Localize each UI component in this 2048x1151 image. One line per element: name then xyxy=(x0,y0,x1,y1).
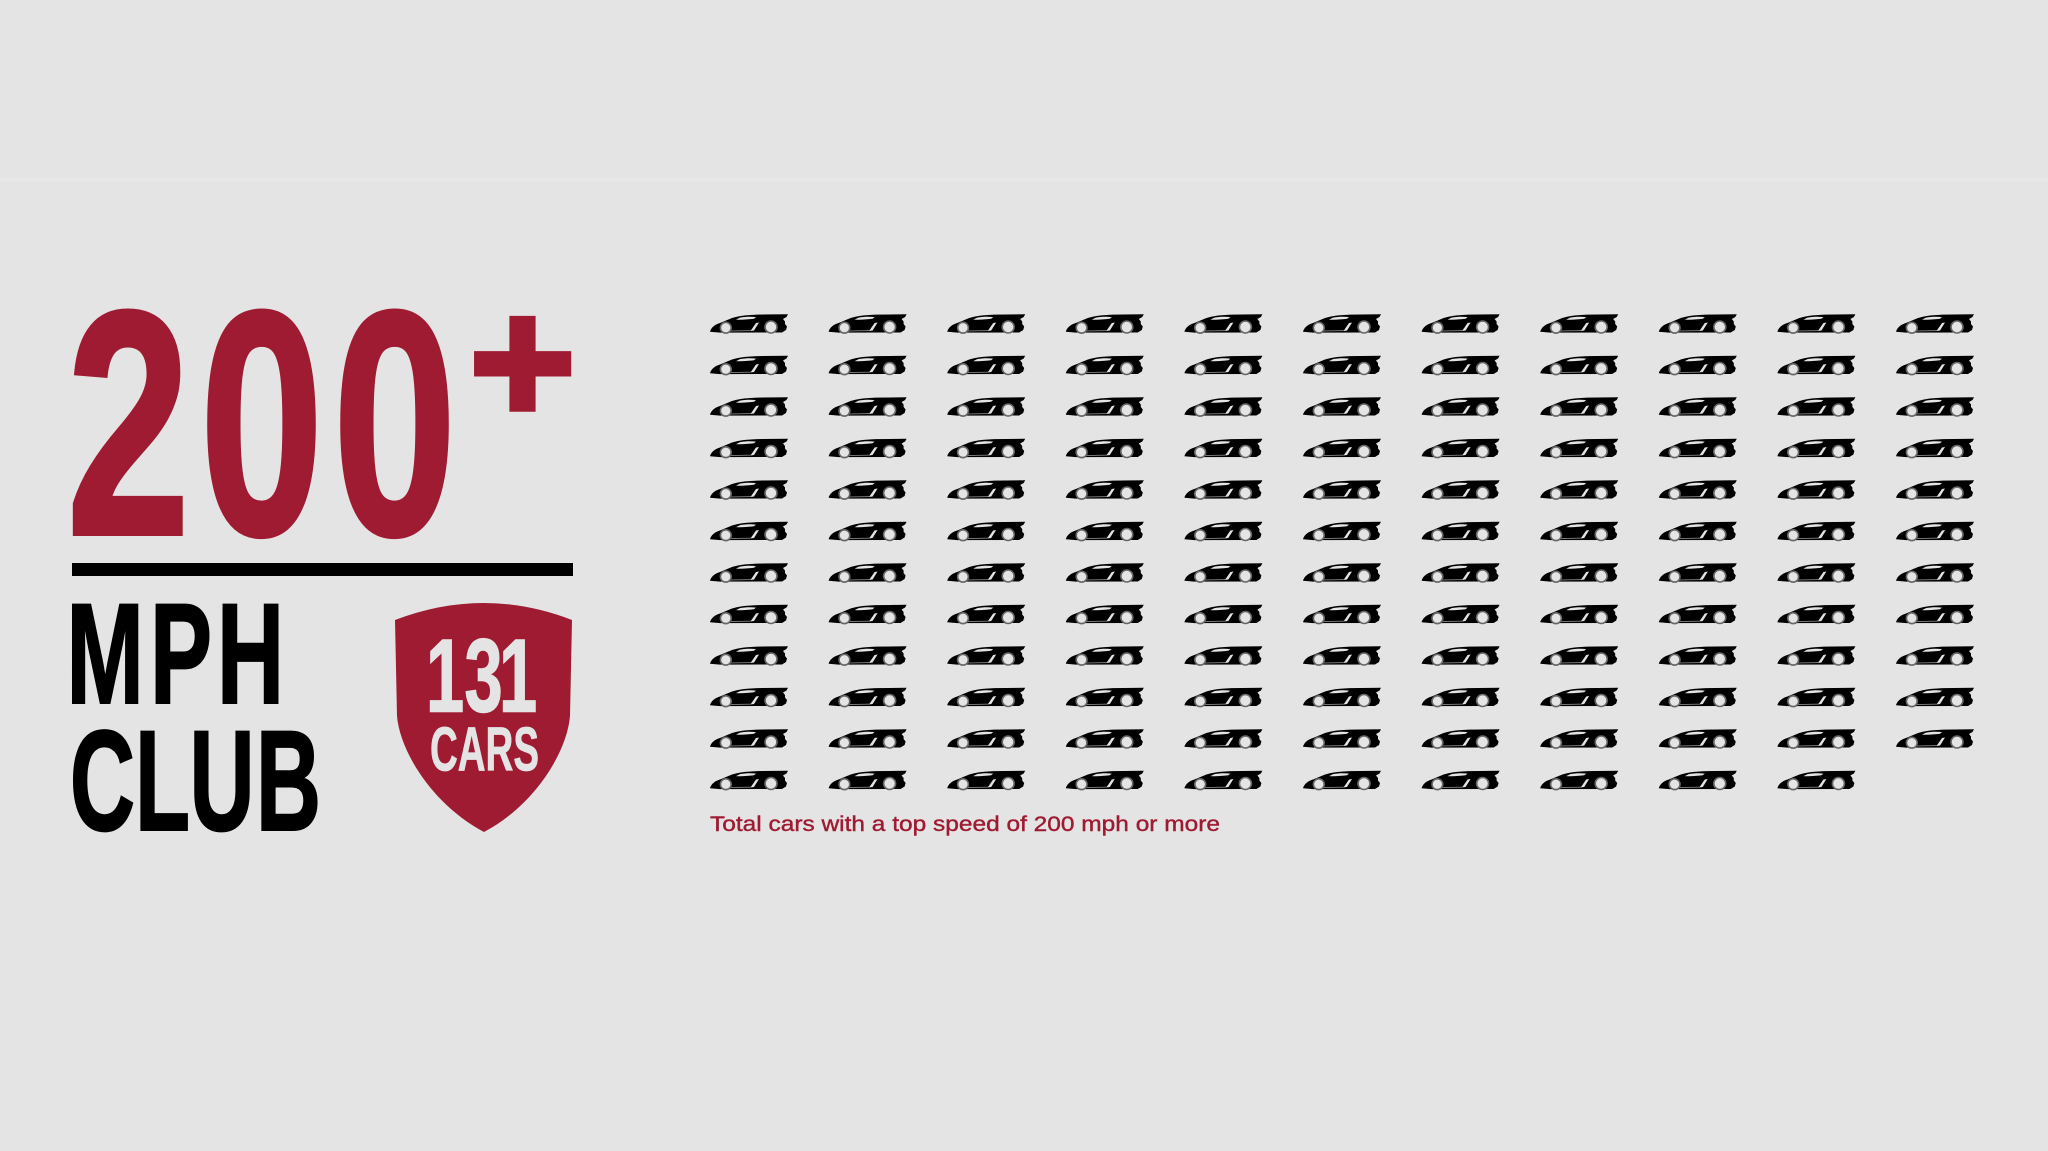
heading: 200: 200 xyxy=(67,246,457,603)
pictogram grid: 131 car icons xyxy=(710,314,1974,790)
shield number: 131: 131 xyxy=(426,617,537,734)
divider bar xyxy=(72,563,573,576)
shield badge: 131 cars xyxy=(395,603,572,832)
heading: CLUB: CLUB xyxy=(70,702,321,861)
caption: Total cars with a top speed of 200 mph or more xyxy=(710,813,1220,836)
heading: MPH: MPH xyxy=(66,574,284,734)
heading: plus sign: + xyxy=(470,263,576,461)
shield shape xyxy=(395,603,572,832)
shield label: CARS: CARS xyxy=(430,716,539,784)
